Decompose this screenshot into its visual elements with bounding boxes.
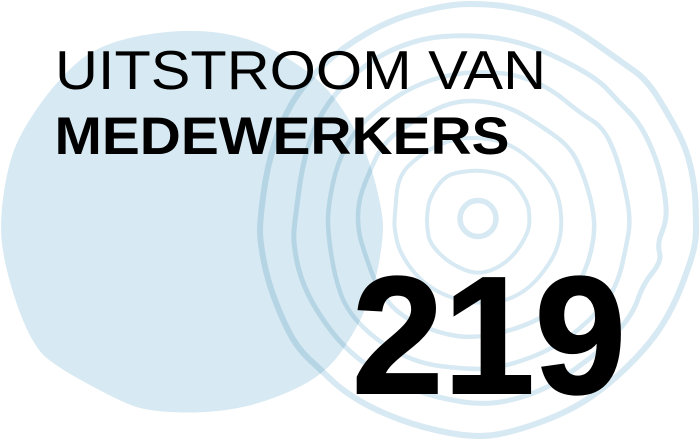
- title line 2: MEDEWERKERS: [54, 107, 510, 166]
- ring: centre: [460, 200, 496, 236]
- ring: third: [394, 138, 561, 303]
- concentric tree rings: [260, 4, 696, 436]
- blue blob: [1, 31, 383, 413]
- ring: fifth: [328, 72, 629, 369]
- ring: sixth: [294, 36, 666, 403]
- title line 1: UITSTROOM VAN: [55, 39, 546, 101]
- ring: outer: [260, 4, 696, 436]
- ring: second: [427, 171, 529, 273]
- ring: fourth: [358, 101, 594, 337]
- big number: 219: [352, 243, 626, 429]
